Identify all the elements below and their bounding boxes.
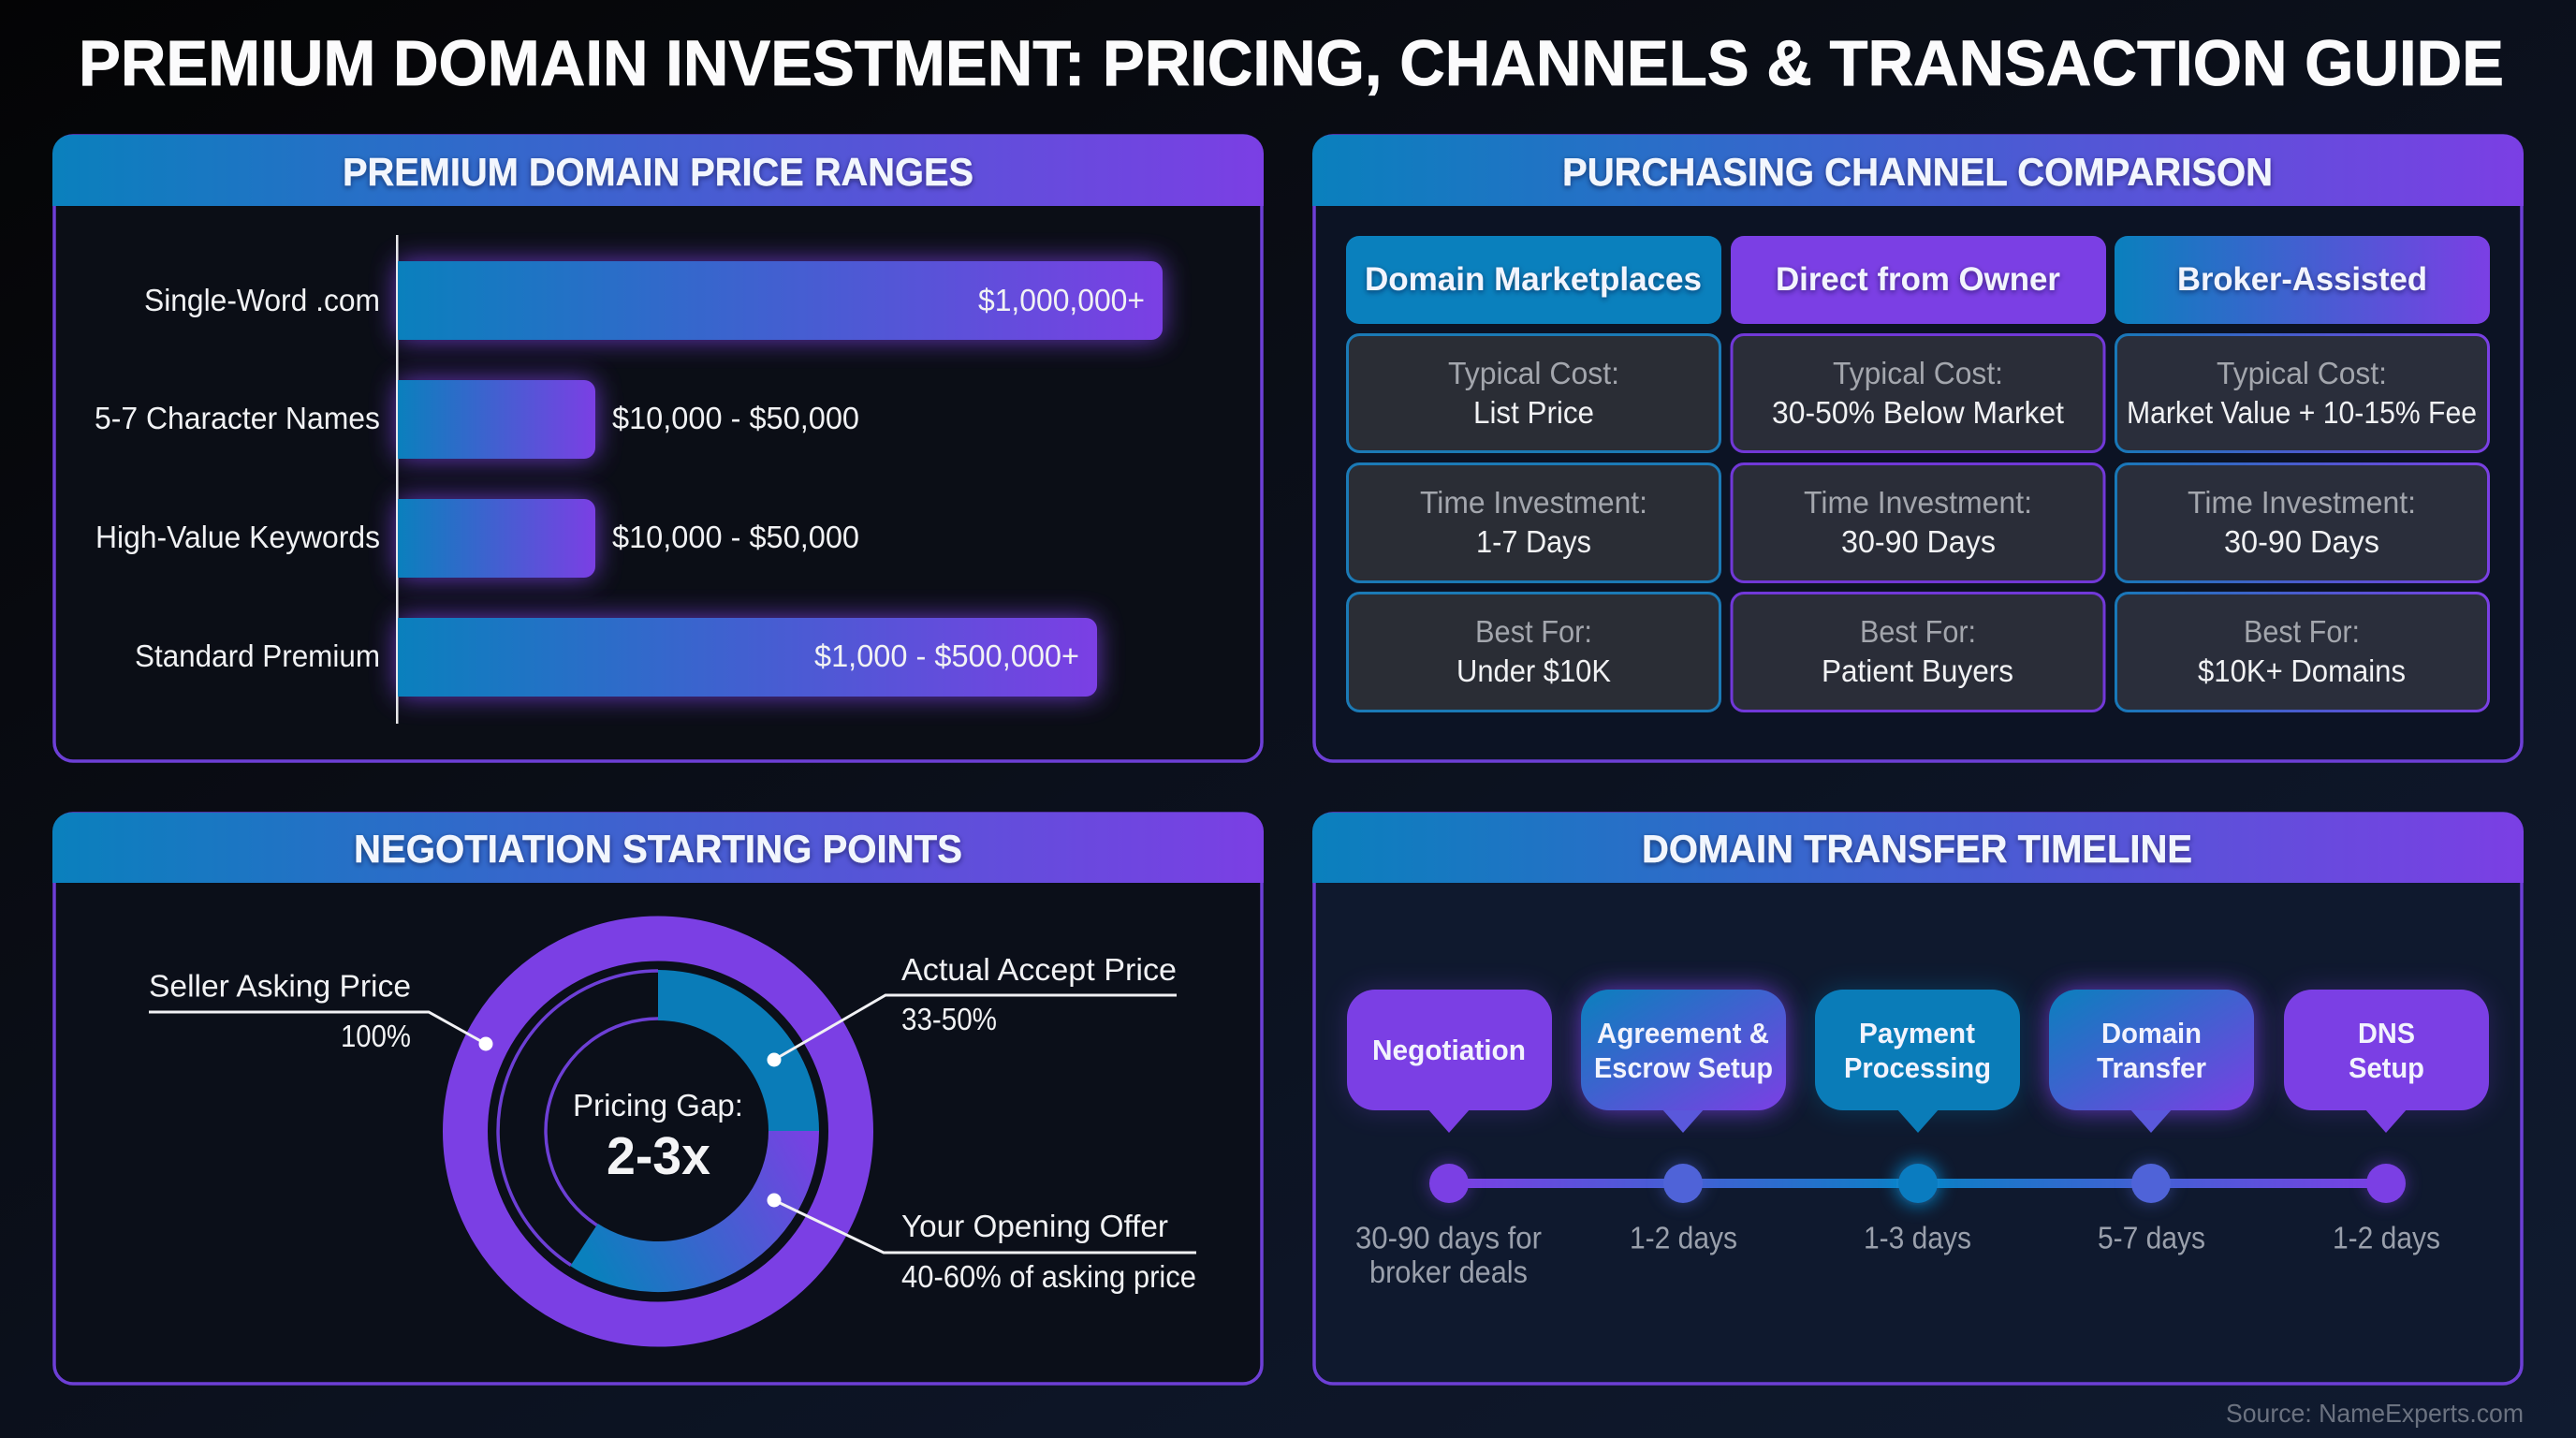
bar: 5-7 character names: 5-7 Character Names: [95, 401, 380, 435]
bar: single-word .com: $1,000,000+: [978, 283, 1145, 317]
step: dns setup: Setup: [2349, 1051, 2424, 1084]
callout: your opening offer: 40-60% of asking price: [901, 1259, 1196, 1294]
step: negotiation: broker deals: [1369, 1255, 1528, 1289]
cell: time investment: [2115, 464, 2488, 582]
callout: seller asking price: Seller Asking Price: [149, 968, 411, 1004]
step: dns setup: DNS: [2358, 1017, 2415, 1049]
panel header: channel comparison: PURCHASING CHANNEL COMPARISON: [1562, 150, 2273, 194]
step: payment processing: Processing: [1844, 1051, 1991, 1084]
panel header: channel comparison: [1312, 135, 2524, 206]
panel header: price ranges: [52, 135, 1264, 206]
bar: standard premium: $1,000 - $500,000+: [814, 638, 1079, 673]
center label: 2-3x: [607, 1126, 710, 1186]
cell: typical cost: [2115, 335, 2488, 451]
step: negotiation: 30-90 days for: [1355, 1221, 1542, 1255]
cell: typical cost: Typical Cost:: [2217, 356, 2387, 390]
panel header: price ranges: PREMIUM DOMAIN PRICE RANGES: [343, 150, 973, 194]
step: domain transfer: Domain: [2101, 1017, 2202, 1049]
step: negotiation: Negotiation: [1372, 1034, 1526, 1066]
column header: broker-assisted: Broker-Assisted: [2177, 261, 2427, 298]
cell: best for: Under $10K: [1456, 653, 1611, 688]
panel: transfer timeline: [1312, 813, 2524, 1384]
cell: best for: [1732, 594, 2104, 712]
cell: typical cost: [1348, 335, 1720, 451]
step: domain transfer: 5-7 days: [2098, 1221, 2205, 1255]
bar: high-value keywords: $10,000 - $50,000: [612, 520, 859, 554]
bar: standard premium: Standard Premium: [135, 638, 380, 673]
cell: best for: Patient Buyers: [1822, 653, 2013, 688]
step: domain transfer: Transfer: [2097, 1051, 2206, 1084]
callout: your opening offer: [768, 1193, 1196, 1294]
callout: actual accept price: Actual Accept Price: [901, 952, 1177, 987]
column header: direct from owner: Direct from Owner: [1776, 261, 2060, 298]
panel: price ranges: [52, 135, 1264, 761]
cell: typical cost: 30-50% Below Market: [1772, 395, 2064, 430]
bar: 5-7 character names: [95, 380, 859, 459]
cell: best for: Best For:: [2244, 614, 2360, 649]
cell: time investment: [1348, 464, 1720, 582]
step: agreement and escrow: [1581, 990, 1786, 1255]
step: domain transfer: [2049, 990, 2254, 1255]
column: broker-assisted: [2115, 236, 2490, 712]
cell: best for: [1348, 594, 1720, 712]
cell: best for: $10K+ Domains: [2198, 653, 2406, 688]
bar: 5-7 character names: $10,000 - $50,000: [612, 401, 859, 435]
panel: channel comparison: [1312, 135, 2524, 761]
timeline connector: [1449, 1179, 2386, 1188]
bar: high-value keywords: [95, 499, 859, 578]
panel: negotiation: [52, 813, 1264, 1384]
cell: time investment: 1-7 Days: [1476, 524, 1591, 559]
title: PREMIUM DOMAIN INVESTMENT: PRICING, CHANNELS & TRANSACTION GUIDE: [79, 27, 2504, 99]
panel header: negotiation: NEGOTIATION STARTING POINTS: [354, 827, 962, 871]
column: domain marketplaces: [1346, 236, 1721, 712]
cell: time investment: 30-90 Days: [2224, 524, 2379, 559]
step: negotiation: [1347, 990, 1552, 1289]
center label: [573, 1089, 743, 1186]
source note: Source: NameExperts.com: [2226, 1399, 2524, 1428]
center label: Pricing Gap:: [573, 1089, 743, 1123]
cell: best for: Best For:: [1860, 614, 1976, 649]
cell: time investment: [1732, 464, 2104, 582]
bar: standard premium: [135, 618, 1097, 697]
panel header: negotiation: [52, 813, 1264, 883]
cell: typical cost: Typical Cost:: [1833, 356, 2003, 390]
donut chart: [465, 938, 851, 1324]
cell: typical cost: [1732, 335, 2104, 451]
cell: time investment: Time Investment:: [2188, 485, 2416, 520]
cell: best for: [2115, 594, 2488, 712]
panel header: transfer timeline: DOMAIN TRANSFER TIMELINE: [1642, 827, 2192, 871]
step: payment processing: [1815, 990, 2020, 1255]
cell: typical cost: Typical Cost:: [1448, 356, 1619, 390]
bar: high-value keywords: High-Value Keywords: [95, 520, 380, 554]
callout: actual accept price: 33-50%: [901, 1002, 997, 1036]
callout: seller asking price: [149, 968, 492, 1053]
callout: seller asking price: 100%: [341, 1019, 411, 1053]
step: payment processing: 1-3 days: [1864, 1221, 1971, 1255]
cell: time investment: 30-90 Days: [1841, 524, 1996, 559]
step: agreement and escrow: Agreement &: [1597, 1017, 1769, 1049]
column header: broker-assisted: [2115, 236, 2490, 324]
column: direct from owner: [1731, 236, 2106, 712]
step: payment processing: Payment: [1859, 1017, 1975, 1049]
cell: time investment: Time Investment:: [1804, 485, 2032, 520]
step: agreement and escrow: 1-2 days: [1630, 1221, 1737, 1255]
callout: actual accept price: [768, 952, 1177, 1067]
cell: time investment: Time Investment:: [1420, 485, 1647, 520]
column header: domain marketplaces: [1346, 236, 1721, 324]
step: dns setup: [2284, 990, 2489, 1255]
cell: best for: Best For:: [1475, 614, 1592, 649]
column header: direct from owner: [1731, 236, 2106, 324]
panel header: transfer timeline: [1312, 813, 2524, 883]
step: agreement and escrow: Escrow Setup: [1594, 1051, 1773, 1084]
callout: your opening offer: Your Opening Offer: [901, 1209, 1168, 1243]
cell: typical cost: List Price: [1473, 395, 1594, 430]
bar: single-word .com: [144, 261, 1163, 340]
bar chart: price ranges: [95, 235, 1163, 724]
column header: domain marketplaces: Domain Marketplaces: [1365, 261, 1702, 298]
cell: typical cost: Market Value + 10-15% Fee: [2127, 395, 2477, 430]
bar: single-word .com: Single-Word .com: [144, 283, 380, 317]
step: dns setup: 1-2 days: [2333, 1221, 2440, 1255]
